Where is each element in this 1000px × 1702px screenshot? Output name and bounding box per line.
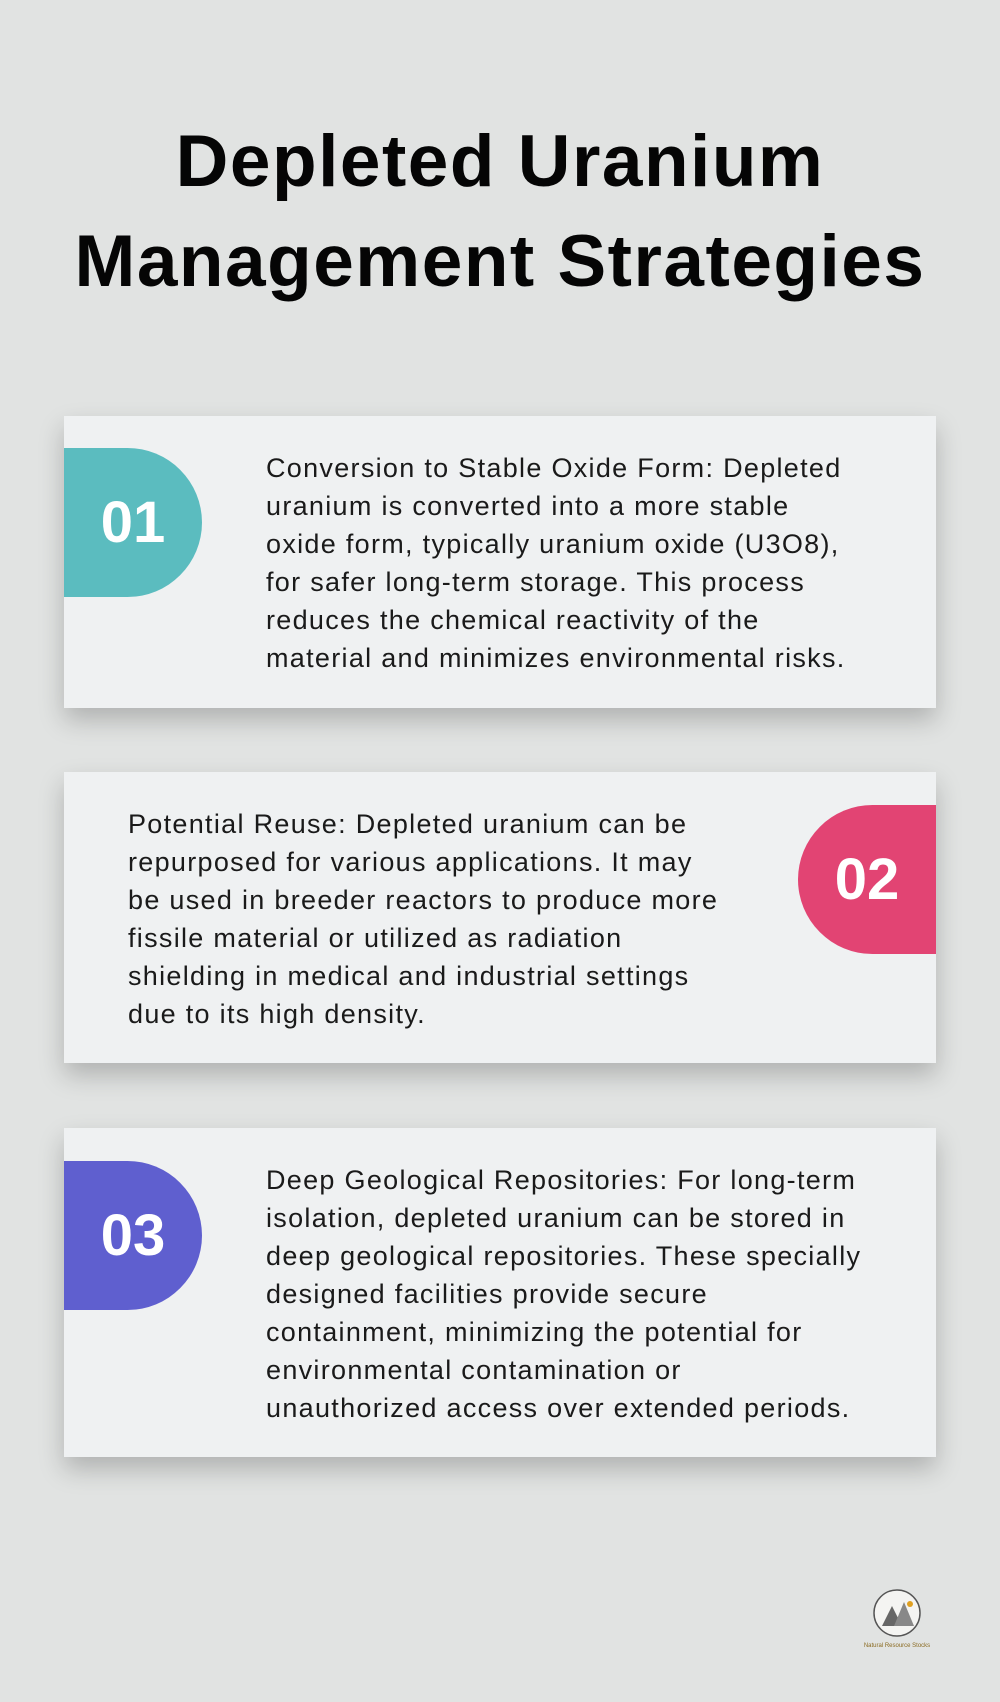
text: reuse: repurposed for various applications. It may (128, 847, 693, 877)
badge 01 (64, 448, 202, 597)
text: conversion: reduces the chemical reactivity of the (266, 605, 760, 635)
text: reuse: due to its high density. (128, 999, 426, 1029)
text: conversion: oxide form, typically uranium oxide (U3O8), (266, 529, 840, 559)
panel: card 1 (64, 416, 936, 708)
text: repositories: Deep Geological Repositories: For long-term (266, 1165, 856, 1195)
text: conversion: material and minimizes environmental risks. (266, 643, 846, 673)
badge 03: 03 (101, 1203, 165, 1268)
logo (864, 1589, 930, 1649)
text: conversion: for safer long-term storage. This process (266, 567, 805, 597)
badge 02: 02 (835, 847, 899, 912)
text: reuse (128, 809, 718, 1029)
text: repositories: unauthorized access over extended periods. (266, 1393, 850, 1423)
title: Depleted Uranium (176, 121, 824, 202)
badge 01: 01 (101, 490, 165, 555)
text: repositories: isolation, depleted uranium can be stored in (266, 1203, 846, 1233)
text: repositories: environmental contamination or (266, 1355, 682, 1385)
text: reuse: shielding in medical and industrial settings (128, 961, 690, 991)
text: conversion (266, 453, 846, 673)
badge 03 (64, 1161, 202, 1310)
title (75, 121, 925, 302)
text: conversion: Conversion to Stable Oxide Form: Depleted (266, 453, 842, 483)
text: repositories: deep geological repositories. These specially (266, 1241, 861, 1271)
badge 02 (798, 805, 936, 954)
panel: card 2 (64, 772, 936, 1063)
title: Management Strategies (75, 221, 925, 302)
text: repositories: containment, minimizing the potential for (266, 1317, 803, 1347)
text: repositories (266, 1165, 861, 1423)
logo: Natural Resource Stocks (864, 1643, 930, 1649)
text: repositories: designed facilities provide secure (266, 1279, 708, 1309)
panel: card 3 (64, 1128, 936, 1457)
text: reuse: Potential Reuse: Depleted uranium can be (128, 809, 687, 839)
text: reuse: fissile material or utilized as radiation (128, 923, 622, 953)
text: conversion: uranium is converted into a more stable (266, 491, 789, 521)
text: reuse: be used in breeder reactors to produce more (128, 885, 718, 915)
